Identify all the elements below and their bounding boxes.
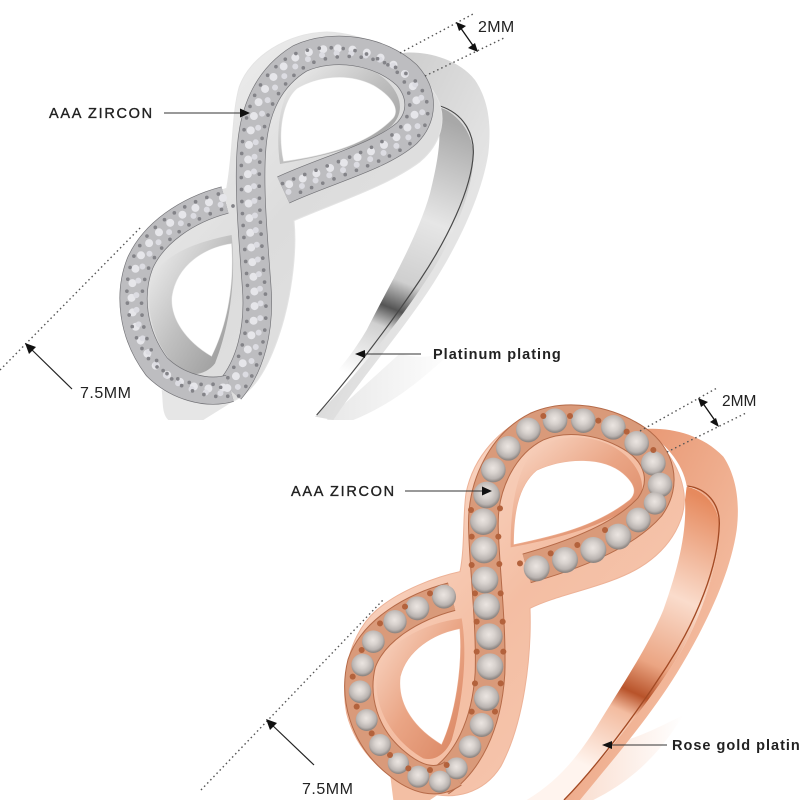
- silver band outer surface: [315, 53, 490, 420]
- callout: rose gold plating: [602, 738, 800, 754]
- rose band inner wall: [527, 487, 719, 800]
- soft shadow under rose band: [560, 715, 683, 800]
- silver platinum infinity ring: [120, 32, 490, 420]
- silver lower loop inner wall: [149, 235, 233, 374]
- silver band inner wall: [293, 107, 474, 415]
- silver band dark edge line: [317, 106, 473, 415]
- soft shadow under silver band: [327, 347, 457, 420]
- rose figure-eight body: [345, 408, 684, 796]
- rose band outer surface: [564, 429, 738, 800]
- rose setting channel: [359, 420, 659, 782]
- dimension: 2MM silver: 2MM: [478, 19, 514, 36]
- rose band base under shank: [390, 773, 450, 800]
- dimension: 7.5MM silver: 7.5MM: [80, 385, 131, 402]
- silver figure-eight body: [120, 32, 442, 404]
- callout: platinum plating: [355, 347, 562, 363]
- callout: AAA zircon rose: AAA ZIRCON: [291, 484, 396, 500]
- dimension: 7.5MM silver: [0, 226, 142, 402]
- silver band base under shank: [162, 390, 230, 420]
- dimension: 2MM rose: [640, 388, 756, 452]
- rose zircon stones: [349, 408, 672, 793]
- dimension: 7.5MM rose: [201, 600, 383, 798]
- rose lower loop inner wall: [376, 618, 464, 759]
- callout: platinum plating: Platinum plating: [433, 347, 562, 363]
- rose metal beads: [350, 413, 656, 773]
- rose gold infinity ring: [345, 408, 738, 800]
- dimension: 2MM rose: 2MM: [722, 393, 756, 410]
- callout: AAA zircon rose: [291, 484, 492, 500]
- dimension: 2MM silver: [400, 13, 514, 76]
- silver upper loop inner wall: [278, 63, 400, 164]
- rose upper loop inner wall: [511, 437, 642, 547]
- rose band dark edge line: [564, 486, 719, 800]
- dimension: 7.5MM rose: 7.5MM: [302, 781, 353, 798]
- callout: AAA zircon silver: AAA ZIRCON: [49, 106, 154, 122]
- silver zircon pave strip: [127, 48, 428, 397]
- callout: AAA zircon silver: [49, 106, 250, 122]
